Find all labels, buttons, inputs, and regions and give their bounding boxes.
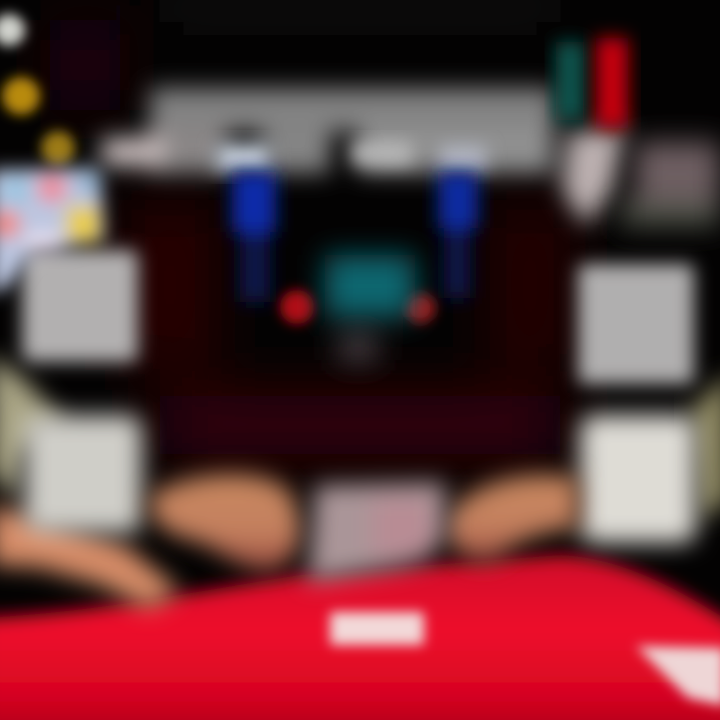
icon: red flag stripe [596,38,628,128]
multicolour fan of cards [0,168,105,295]
teal center graphic [325,255,415,361]
icon: right red dot [405,293,435,323]
panel: red table [0,555,720,720]
title highlights over blue columns [216,142,486,172]
icon: left red dot [280,290,314,324]
icon: yellow circle [2,77,40,115]
left white cuff [24,415,142,533]
left gray text panel [22,250,138,362]
white table label center [330,612,424,645]
right white cuff [580,415,696,543]
left arm sleeve: khaki [0,355,65,500]
right hand [446,475,578,563]
left blue column [232,172,276,302]
heading: blurred title [102,88,625,226]
icon: small yellow circle [41,131,75,165]
icon: green flag stripe [556,42,584,120]
left hand [150,474,301,572]
right gray photo strip [620,142,720,226]
center playing cards [308,482,445,582]
dark red backdrop glow [50,0,570,455]
icon: white circle [0,14,25,46]
right arm sleeve: khaki [690,372,720,520]
right gray text panel [578,264,694,384]
white table label corner [636,646,720,706]
right blue column [438,172,478,298]
left forearm [0,505,180,610]
